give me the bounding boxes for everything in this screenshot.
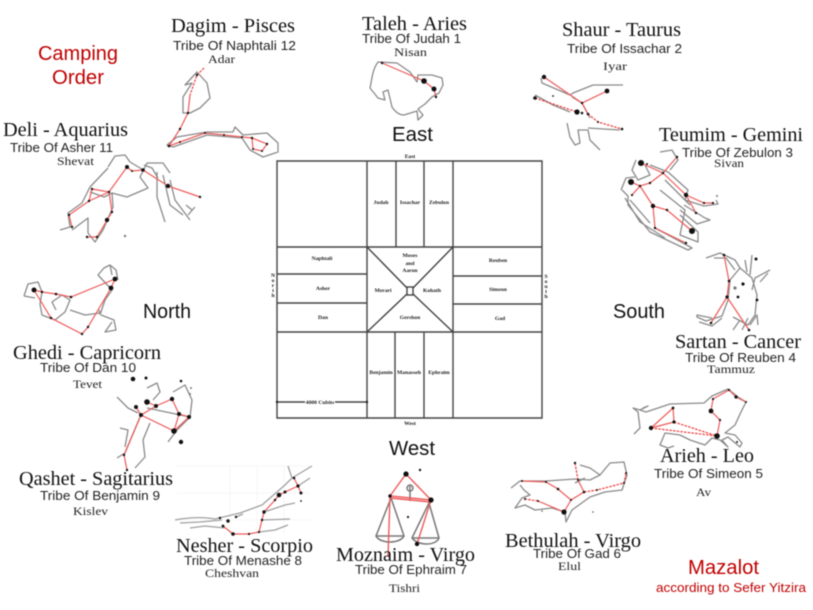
sign: Cancer	[675, 253, 801, 376]
sign: Scorpio	[175, 466, 313, 580]
sign: Capricorn: Tevet	[73, 377, 103, 391]
direction labels: North	[143, 301, 191, 323]
camp plan diagram	[271, 154, 548, 427]
sign: Gemini: Sivan	[714, 156, 744, 170]
sign: Virgo: Tribe Of Gad 6	[533, 547, 621, 561]
camp plan diagram: N	[271, 273, 275, 279]
sign: Taurus: Iyar	[603, 59, 627, 73]
camp plan diagram: Gad	[495, 316, 506, 322]
sign: Sagittarius	[19, 376, 192, 518]
camp plan diagram: Gershon	[400, 315, 421, 321]
camp plan diagram: t	[545, 289, 547, 295]
sign: Pisces: Dagim - Pisces	[171, 15, 295, 37]
sign: Leo: Arieh - Leo	[660, 445, 754, 467]
sign: Aquarius	[3, 119, 201, 242]
sign: Libra: Moznaim - Virgo	[336, 544, 475, 566]
camp plan diagram: h	[544, 294, 548, 300]
sign: Pisces	[167, 15, 296, 157]
direction labels	[143, 124, 665, 460]
sign: Cancer: Tammuz	[707, 362, 755, 376]
direction labels: South	[613, 301, 665, 323]
sign: Virgo: Elul	[558, 559, 582, 573]
camp plan diagram: Asher	[316, 286, 331, 292]
camp plan diagram: Manasseh	[397, 370, 422, 376]
camp plan diagram: h	[271, 293, 275, 299]
sign: Sagittarius: Tribe Of Benjamin 9	[40, 489, 160, 503]
sign: Libra	[336, 469, 475, 595]
camp plan diagram: Judah	[374, 200, 389, 206]
sign: Aries	[362, 13, 467, 120]
title: mazalot: according to Sefer Yitzira	[656, 581, 806, 595]
sign: Pisces: Tribe Of Naphtali 12	[173, 39, 296, 53]
direction labels: East	[392, 124, 433, 146]
camp plan diagram: 4000 Cubits	[306, 400, 335, 406]
sign: Aquarius: Tribe Of Asher 11	[10, 141, 113, 155]
sign: Leo: Av	[696, 485, 711, 499]
sign: Pisces: Adar	[208, 52, 235, 66]
camp plan diagram: Reuben	[489, 258, 508, 264]
sign: Virgo	[505, 462, 641, 573]
sign: Taurus	[533, 19, 682, 150]
title: camping order	[38, 43, 118, 89]
title: camping order: Camping	[38, 43, 118, 65]
camp plan diagram: East	[405, 154, 415, 160]
camp plan diagram: Kohath	[423, 288, 442, 294]
sign: Capricorn	[13, 265, 161, 391]
camp plan diagram: r	[272, 283, 275, 289]
camp plan diagram: Issachar	[400, 200, 421, 206]
sign: Scorpio: Tribe Of Menashe 8	[184, 554, 302, 568]
sign: Taurus: Tribe Of Issachar 2	[567, 42, 682, 56]
title: mazalot	[656, 557, 806, 595]
sign: Cancer: Sartan - Cancer	[675, 331, 801, 353]
direction labels: West	[389, 438, 435, 460]
camp plan diagram: and	[405, 261, 415, 267]
sign: Leo: Tribe Of Simeon 5	[654, 467, 763, 481]
title: camping order: Order	[52, 67, 104, 89]
sign: Sagittarius: Kislev	[73, 504, 108, 518]
camp plan diagram: o	[272, 278, 275, 284]
sign: Libra: Tribe Of Ephraim 7	[355, 563, 467, 577]
sign: Scorpio: Cheshvan	[205, 566, 259, 580]
camp plan diagram: Moses	[403, 253, 418, 259]
sign: Aquarius: Deli - Aquarius	[3, 119, 128, 141]
camp plan diagram: o	[545, 279, 548, 285]
sign: Gemini	[621, 124, 803, 250]
sign: Sagittarius: Qashet - Sagitarius	[19, 468, 173, 490]
camp plan diagram: Ephraim	[428, 370, 450, 376]
camp plan diagram: t	[272, 288, 274, 294]
sign: Aquarius: Shevat	[57, 154, 95, 168]
sign: Cancer: Tribe Of Reuben 4	[685, 351, 796, 365]
camp plan diagram: Aaron	[402, 268, 418, 274]
title: mazalot: Mazalot	[688, 557, 759, 579]
camp plan diagram: Zebulon	[429, 200, 450, 206]
sign: Gemini: Tribe Of Zebulon 3	[682, 146, 793, 160]
sign: Aries: Taleh - Aries	[362, 13, 467, 35]
sign: Capricorn: Ghedi - Capricorn	[13, 342, 161, 364]
sign: Scorpio: Nesher - Scorpio	[176, 535, 313, 557]
sign: Aries: Nisan	[394, 45, 427, 59]
sign: Taurus: Shaur - Taurus	[562, 19, 681, 41]
sign: Virgo: Bethulah - Virgo	[505, 530, 641, 552]
sign: Aries: Tribe Of Judah 1	[362, 32, 461, 46]
camp plan diagram: u	[544, 284, 548, 290]
camp plan diagram: Merari	[374, 288, 392, 294]
camp plan diagram: Benjamin	[369, 370, 394, 376]
camp plan diagram: Dan	[318, 315, 329, 321]
camp plan diagram: S	[544, 274, 548, 280]
camp plan diagram: Simeon	[489, 287, 508, 293]
camp plan diagram: West	[404, 421, 416, 427]
sign: Capricorn: Tribe Of Dan 10	[40, 361, 136, 375]
sign: Leo	[633, 389, 763, 499]
sign: Libra: Tishri	[389, 581, 421, 595]
sign: Gemini: Teumim - Gemini	[659, 124, 803, 146]
camp plan diagram: Naphtali	[312, 256, 333, 262]
